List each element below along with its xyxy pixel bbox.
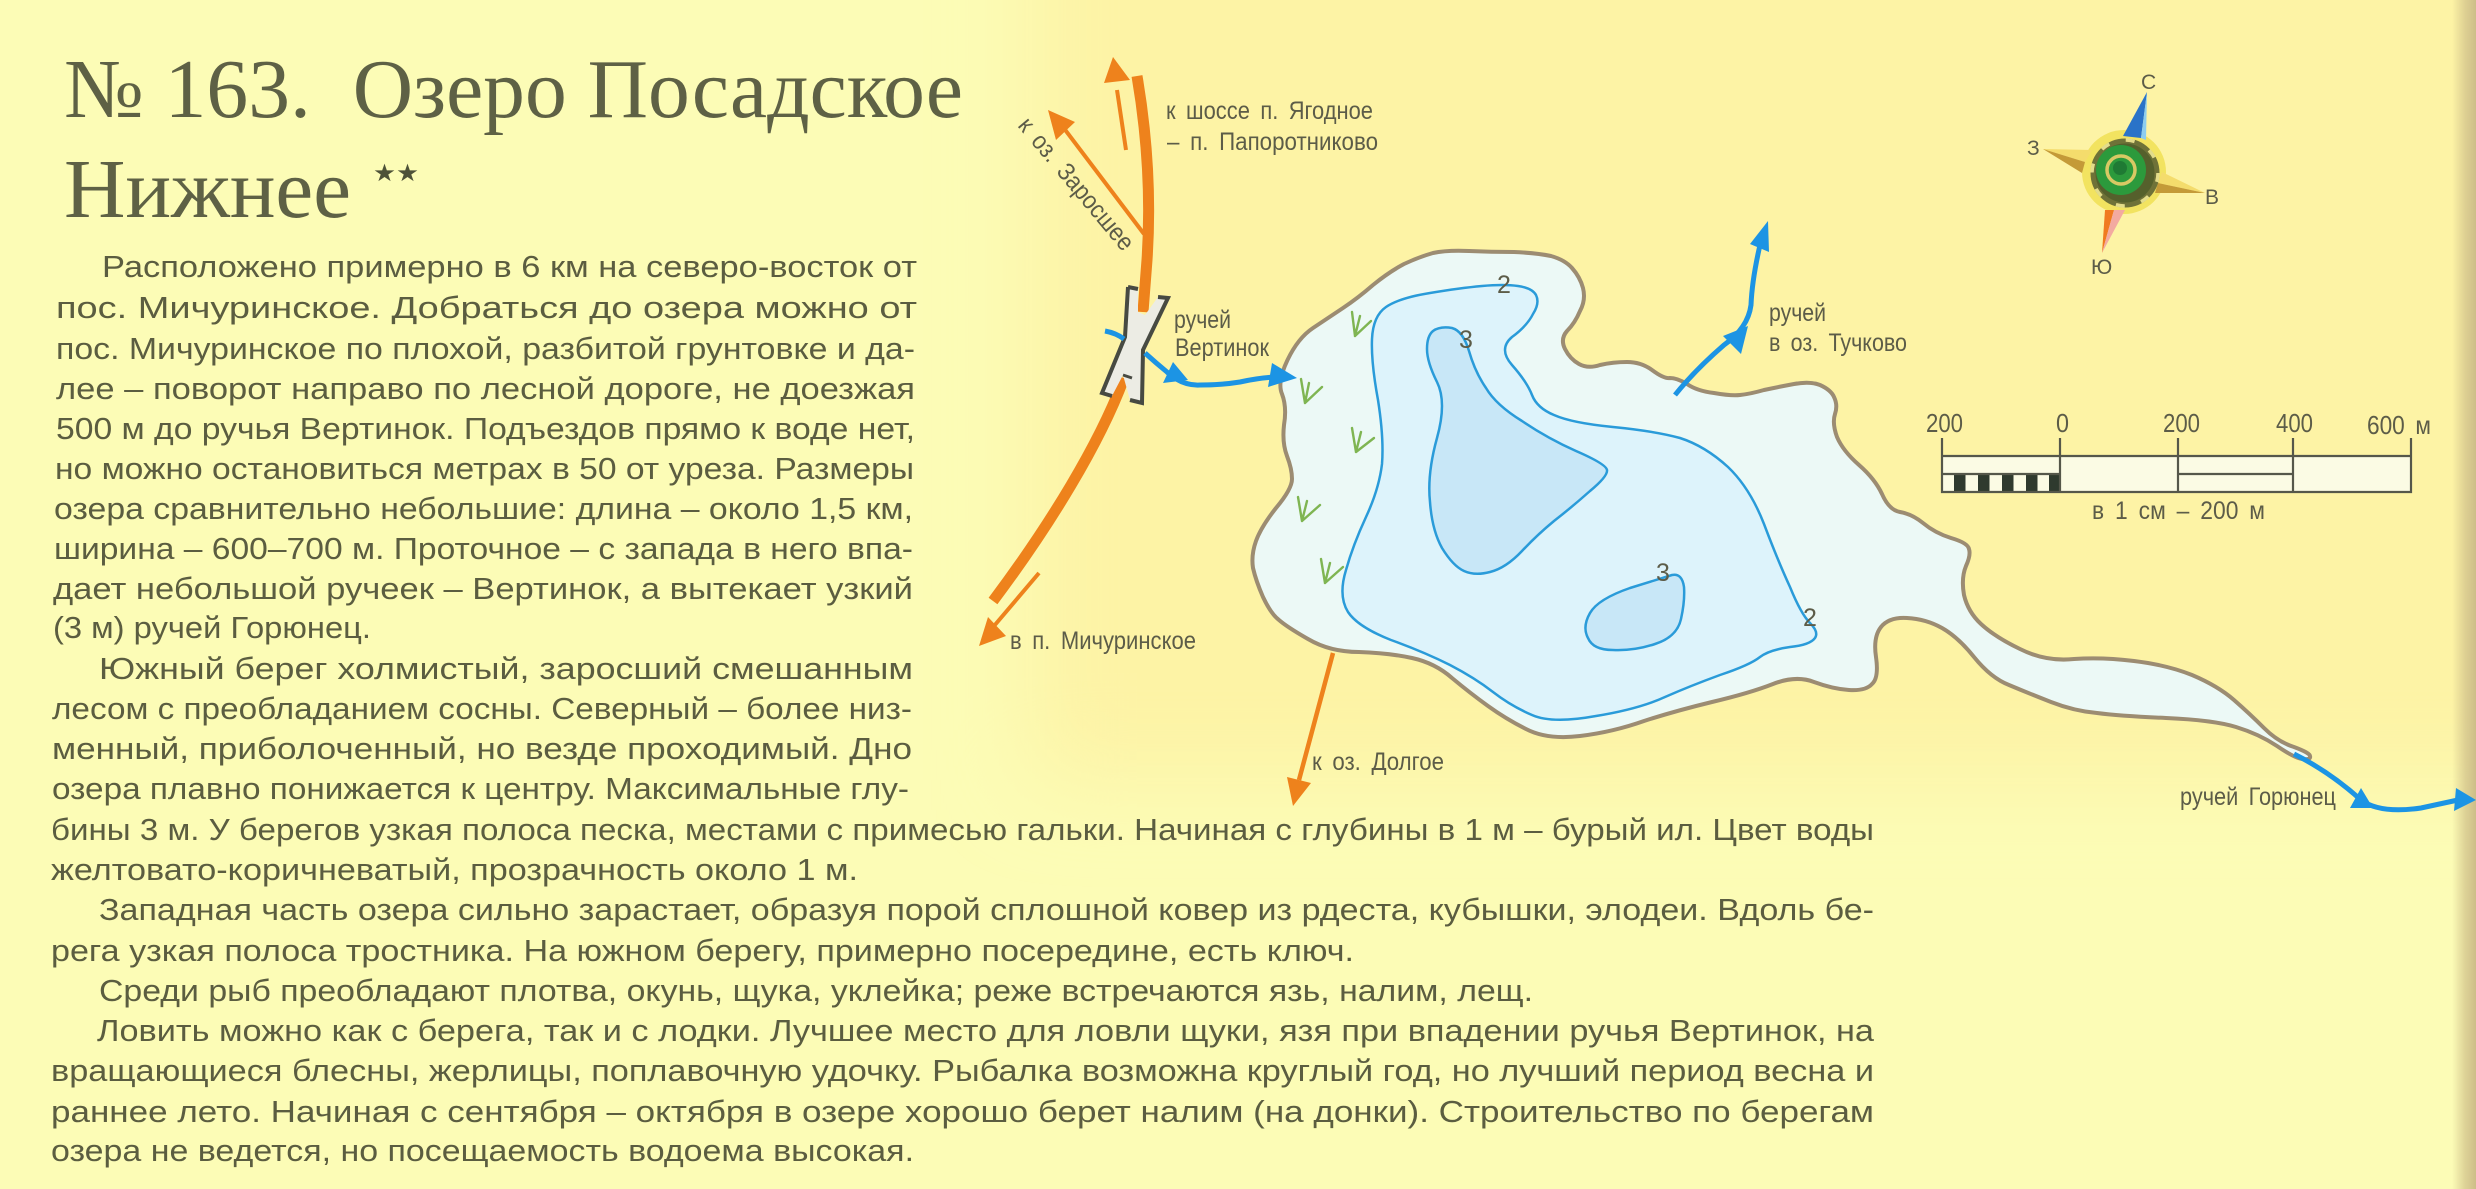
map labels: к оз. Долгое bbox=[1312, 748, 1444, 776]
lake outline bbox=[1252, 251, 2310, 759]
title bbox=[64, 43, 963, 236]
east point bbox=[2158, 172, 2205, 193]
scale numbers: 200 bbox=[2163, 408, 2200, 438]
scale numbers: 400 bbox=[2276, 408, 2313, 438]
text block: description, narrow column and full-width paragraphs: пос. Мичуринское по плохой, разбитой грунтовке и да- bbox=[56, 331, 915, 366]
depth labels: 3 bbox=[1656, 559, 1670, 587]
map labels: к оз. Заросшее bbox=[1012, 112, 1140, 256]
text block: description, narrow column and full-width paragraphs: желтовато-коричневатый, прозрачность около 1 м. bbox=[51, 852, 858, 887]
scale numbers: 200 bbox=[1926, 408, 1963, 438]
medallion backing bbox=[2082, 130, 2166, 214]
arrow: to highway bbox=[1104, 57, 1130, 150]
text block: description, narrow column and full-width paragraphs: вращающиеся блесны, жерлицы, поплавочную удочку. Рыбалка возможна круглый год, но лучший период весна и bbox=[51, 1053, 1874, 1088]
depth labels: 2 bbox=[1497, 271, 1511, 299]
scale bar bbox=[1926, 408, 2431, 525]
arrow: to Zarosshee lake bbox=[1048, 110, 1144, 234]
map labels: ручей bbox=[1174, 306, 1231, 334]
arrow: to Dolgoe lake bbox=[1287, 653, 1333, 806]
map labels: Вертинок bbox=[1175, 334, 1270, 362]
depth labels bbox=[1459, 271, 1817, 632]
title: № 163. Озеро Посадское bbox=[64, 43, 963, 136]
text block: description, narrow column and full-width paragraphs: лесом с преобладанием сосны. Северный – более низ- bbox=[52, 691, 912, 726]
map labels bbox=[1010, 97, 2336, 811]
arrow: to Michurinskoe bbox=[979, 573, 1039, 646]
text block: description, narrow column and full-width paragraphs: лее – поворот направо по лесной дороге, не доезжая bbox=[56, 371, 915, 406]
depth labels: 3 bbox=[1459, 326, 1473, 354]
map labels: – п. Папоротниково bbox=[1167, 128, 1378, 156]
depth contour 3 m, south basin bbox=[1585, 575, 1684, 650]
road: lower highway bbox=[993, 378, 1124, 601]
road: upper highway bbox=[1137, 76, 1149, 312]
text block: description, narrow column and full-width paragraphs: озера не ведется, но посещаемость водоема высокая. bbox=[51, 1133, 914, 1168]
title: Нижнее bbox=[64, 143, 351, 236]
compass letters: В bbox=[2205, 186, 2219, 209]
scale caption: в 1 см – 200 м bbox=[2092, 497, 2265, 525]
scale checker bbox=[1954, 474, 2060, 492]
stream: Vertinok bbox=[1105, 331, 1297, 387]
stream: Goryunets bbox=[2294, 754, 2476, 811]
scale numbers: 0 bbox=[2056, 408, 2069, 438]
text block: description, narrow column and full-width paragraphs: пос. Мичуринское. Добраться до озера можно от bbox=[56, 290, 917, 325]
text block: description, narrow column and full-width paragraphs: менный, приболоченный, но везде проходимый. Дно bbox=[52, 731, 912, 766]
icon: reeds bbox=[1298, 312, 1374, 583]
map labels: ручей Горюнец bbox=[2180, 783, 2336, 811]
map labels: к шоссе п. Ягодное bbox=[1166, 97, 1373, 125]
depth labels: 2 bbox=[1803, 604, 1817, 632]
text block: description, narrow column and full-width paragraphs: озера сравнительно небольшие: длина – около 1,5 км, bbox=[54, 491, 913, 526]
scale numbers: 600 м bbox=[2367, 410, 2431, 440]
text block: description, narrow column and full-width paragraphs: но можно остановиться метрах в 50 от уреза. Размеры bbox=[55, 451, 914, 486]
bridge over stream bbox=[1102, 287, 1168, 403]
text block: description, narrow column and full-width paragraphs: озера плавно понижается к центру. Максимальные глу- bbox=[52, 771, 909, 806]
dragon ring bbox=[2093, 141, 2157, 205]
map labels: ручей bbox=[1769, 299, 1826, 327]
icon: compass rose bbox=[2027, 71, 2219, 279]
north point bbox=[2123, 92, 2147, 138]
map labels: в оз. Тучково bbox=[1769, 329, 1907, 357]
text block: description, narrow column and full-width paragraphs: Среди рыб преобладают плотва, окунь, щука, уклейка; реже встречаются язь, налим, лещ. bbox=[99, 973, 1533, 1008]
map: lake bbox=[1252, 251, 2310, 759]
compass letters: С bbox=[2141, 71, 2156, 94]
text block: description, narrow column and full-width paragraphs bbox=[51, 249, 1875, 1168]
text block: description, narrow column and full-width paragraphs: бины 3 м. У берегов узкая полоса песка, местами с примесью гальки. Начиная с глубины в 1 м – бурый ил. Цвет воды bbox=[51, 812, 1874, 847]
depth contour 2 m bbox=[1342, 285, 1816, 720]
compass letters: З bbox=[2027, 137, 2040, 160]
text block: description, narrow column and full-width paragraphs: 500 м до ручья Вертинок. Подъездов прямо к воде нет, bbox=[56, 411, 915, 446]
title: ★★ bbox=[373, 159, 419, 187]
map labels: в п. Мичуринское bbox=[1010, 627, 1196, 655]
text block: description, narrow column and full-width paragraphs: рега узкая полоса тростника. На южном берегу, примерно посередине, есть ключ. bbox=[51, 933, 1354, 968]
stream: to Tuchkovo lake bbox=[1675, 221, 1769, 395]
depth contour 3 m, north basin bbox=[1427, 327, 1607, 574]
west point bbox=[2043, 149, 2092, 162]
south point bbox=[2102, 210, 2114, 253]
text block: description, narrow column and full-width paragraphs: Западная часть озера сильно зарастает, образуя порой сплошной ковер из рдеста, кубышки, элодеи. Вдоль бе- bbox=[99, 892, 1874, 927]
text block: description, narrow column and full-width paragraphs: Южный берег холмистый, заросший смешанным bbox=[99, 651, 913, 686]
text block: description, narrow column and full-width paragraphs: раннее лето. Начиная с сентября – октября в озере хорошо берет налим (на донки). Строительство по берегам bbox=[51, 1094, 1874, 1129]
scale numbers bbox=[1926, 408, 2431, 440]
compass letters: Ю bbox=[2091, 256, 2112, 279]
text block: description, narrow column and full-width paragraphs: Расположено примерно в 6 км на северо-восток от bbox=[102, 249, 917, 284]
text block: description, narrow column and full-width paragraphs: Ловить можно как с берега, так и с лодки. Лучшее место для ловли щуки, язя при впадении ручья Вертинок, на bbox=[97, 1013, 1875, 1048]
text block: description, narrow column and full-width paragraphs: дает небольшой ручеек – Вертинок, а вытекает узкий bbox=[53, 571, 913, 606]
text block: description, narrow column and full-width paragraphs: (3 м) ручей Горюнец. bbox=[53, 610, 371, 645]
compass letters bbox=[2027, 71, 2219, 279]
text block: description, narrow column and full-width paragraphs: ширина – 600–700 м. Проточное – с запада в него впа- bbox=[54, 531, 913, 566]
